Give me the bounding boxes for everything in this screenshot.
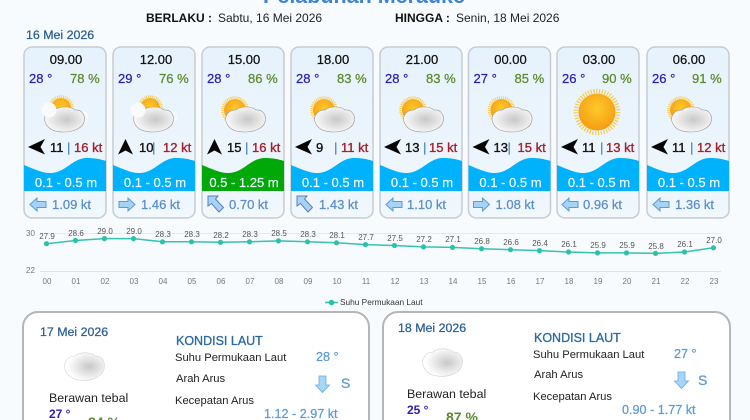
forecast card 21.00: 21.00 (406, 52, 438, 67)
line chart: sea surface temperature: 25.9 (619, 241, 635, 250)
icon: current arrow down (316, 376, 330, 392)
icon: current arrow down (674, 372, 688, 388)
line chart: sea surface temperature: 28.2 (213, 231, 229, 240)
forecast card 21.00: 0.1 - 0.5 m (391, 175, 453, 190)
icon: thick cloud (423, 349, 463, 376)
forecast card 03.00: | (600, 140, 603, 155)
forecast card 18.00: 18.00 (317, 52, 349, 67)
icon: current arrow (119, 198, 135, 211)
forecast card 09.00: 09.00 (50, 52, 82, 67)
icon: sun behind cloud (42, 96, 88, 132)
line chart: sea surface temperature: 26.8 (474, 237, 490, 246)
forecast card 03.00 (557, 47, 639, 218)
line chart: sea surface temperature: 15 (478, 277, 487, 286)
forecast card 00.00: 85 % (514, 71, 545, 86)
icon: full sun (576, 91, 618, 133)
forecast card 21.00: 28 ° (385, 71, 408, 86)
line chart: sea surface temperature: 29.0 (97, 227, 113, 236)
forecast card 15.00: 15 (227, 140, 241, 155)
date heading: 17 Mei 2026 (40, 325, 108, 339)
line chart: sea surface temperature: 28.5 (271, 229, 287, 238)
forecast card 15.00: 15.00 (228, 52, 260, 67)
line chart: sea surface temperature: 16 (507, 277, 516, 286)
panel: 18 Mei 2026: Arah Arus (534, 369, 584, 381)
line chart: sea surface temperature: 22 (681, 277, 690, 286)
forecast card 12.00: 0.1 - 0.5 m (124, 175, 186, 190)
forecast card 18.00: 11 kt (341, 140, 369, 155)
chart legend: Suhu Permukaan Laut (340, 297, 423, 307)
forecast card 21.00: 13 (405, 140, 419, 155)
validity header: BERLAKU : (146, 11, 212, 25)
line chart: sea surface temperature: 28.6 (68, 229, 84, 238)
forecast card 00.00: 27 ° (474, 71, 497, 86)
line chart: sea surface temperature: 09 (304, 277, 313, 286)
line chart: sea surface temperature: 27.0 (706, 236, 722, 245)
panel: 17 Mei 2026: Berawan tebal (49, 391, 128, 405)
line chart: sea surface temperature: 25.9 (590, 241, 606, 250)
line chart: sea surface temperature: 27.2 (416, 235, 432, 244)
icon: wind direction (651, 139, 668, 154)
line chart: sea surface temperature: 28.3 (155, 230, 171, 239)
icon: current arrow (474, 198, 490, 211)
date heading: 18 Mei 2026 (398, 321, 466, 335)
panel: 18 Mei 2026: 0.90 - 1.77 kt (622, 403, 696, 417)
wave height (647, 158, 729, 191)
forecast card 09.00: 28 ° (29, 71, 52, 86)
line chart: sea surface temperature: 05 (188, 277, 197, 286)
forecast card 03.00: 13 kt (606, 140, 635, 155)
forecast card 12.00: 29 ° (118, 71, 141, 86)
panel: 18 Mei 2026: Kecepatan Arus (533, 391, 612, 403)
line chart: sea surface temperature: 27.1 (445, 235, 461, 244)
line chart: sea surface temperature: 28.3 (300, 230, 316, 239)
icon: sun behind cloud (130, 96, 178, 132)
forecast card 15.00: 28 ° (207, 71, 230, 86)
forecast card 12.00: 10 (139, 140, 153, 155)
panel: 17 Mei 2026: Arah Arus (176, 373, 226, 385)
panel: 17 Mei 2026 (23, 312, 369, 420)
wave height (291, 158, 373, 191)
icon: sun and cloud (312, 98, 355, 132)
validity header: HINGGA : (395, 11, 450, 25)
forecast card 18.00: | (334, 140, 337, 155)
forecast card 06.00 (647, 47, 729, 218)
forecast card 15.00: 0.5 - 1.25 m (209, 175, 279, 190)
forecast card 06.00: 0.1 - 0.5 m (658, 175, 720, 190)
wave height (202, 158, 284, 191)
panel: 17 Mei 2026: Suhu Permukaan Laut (175, 352, 287, 364)
panel: 18 Mei 2026 (383, 312, 730, 420)
forecast card 18.00 (291, 47, 373, 218)
icon: wind direction (561, 139, 578, 154)
forecast card 12.00: 1.46 kt (141, 197, 180, 212)
panel: 18 Mei 2026: Berawan tebal (407, 387, 486, 401)
forecast card 09.00: 1.09 kt (52, 197, 91, 212)
forecast card 03.00: 26 ° (562, 71, 585, 86)
wave height (24, 158, 106, 191)
forecast card 09.00: | (67, 140, 70, 155)
forecast card 15.00 (202, 47, 284, 218)
icon: sun and cloud (489, 98, 532, 132)
line chart: sea surface temperature: 22 (26, 266, 35, 275)
wave height (380, 158, 462, 191)
line chart: sea surface temperature: 25.8 (648, 242, 664, 251)
line chart: sea surface temperature: 12 (391, 277, 400, 286)
forecast card 09.00: 0.1 - 0.5 m (35, 175, 97, 190)
line chart: sea surface temperature: 13 (420, 277, 429, 286)
line chart: sea surface temperature: 28.3 (184, 230, 200, 239)
icon: current arrow (30, 198, 46, 211)
line chart: sea surface temperature: 03 (130, 277, 139, 286)
line chart: sea surface temperature: 11 (362, 277, 371, 286)
forecast card 12.00 (113, 47, 195, 218)
forecast card 03.00: 0.1 - 0.5 m (568, 175, 630, 190)
icon: thick cloud (65, 353, 105, 380)
forecast card 18.00: 0.1 - 0.5 m (302, 175, 364, 190)
line chart: sea surface temperature: 08 (275, 277, 284, 286)
forecast card 12.00: | (152, 140, 155, 155)
line chart: sea surface temperature: 21 (652, 277, 661, 286)
line chart: sea surface temperature: 06 (217, 277, 226, 286)
line chart: sea surface temperature: 26.1 (677, 240, 693, 249)
forecast card 06.00: 26 ° (652, 71, 675, 86)
icon: wind direction (472, 139, 490, 154)
icon: current arrow (653, 198, 669, 211)
forecast card 03.00: 90 % (602, 71, 632, 86)
panel: 18 Mei 2026: Suhu Permukaan Laut (533, 349, 645, 361)
forecast card 00.00: 15 kt (518, 140, 546, 155)
forecast card 00.00: | (508, 140, 511, 155)
forecast card 18.00: 9 (316, 140, 323, 155)
forecast card 03.00: 11 (582, 140, 596, 155)
validity header: Senin, 18 Mei 2026 (456, 11, 560, 25)
forecast card 06.00: 11 (672, 140, 686, 155)
forecast card 21.00 (380, 47, 462, 218)
forecast card 06.00: 12 kt (697, 140, 726, 155)
icon: current arrow (297, 196, 312, 212)
line chart: sea surface temperature: 26.4 (532, 239, 548, 248)
line chart: sea surface temperature (26, 227, 722, 286)
forecast card 12.00: 12 kt (163, 140, 192, 155)
forecast card 21.00: | (423, 140, 426, 155)
forecast card 06.00: 91 % (692, 71, 722, 86)
validity header (146, 11, 560, 25)
line chart: sea surface temperature: 10 (333, 277, 342, 286)
forecast card 21.00: 83 % (426, 71, 456, 86)
forecast card 18.00: 28 ° (296, 71, 319, 86)
forecast card 00.00 (468, 47, 550, 218)
line chart: sea surface temperature: 04 (159, 277, 168, 286)
panel: 18 Mei 2026: 25 ° (407, 403, 429, 417)
forecast card 12.00: 12.00 (140, 52, 172, 67)
forecast card 12.00: 76 % (159, 71, 189, 86)
line chart: sea surface temperature: 20 (623, 277, 632, 286)
forecast card 06.00: | (690, 140, 693, 155)
line chart: sea surface temperature: 00 (43, 277, 52, 286)
forecast card 00.00: 13 (494, 140, 508, 155)
panel: 17 Mei 2026: Kecepatan Arus (175, 395, 254, 407)
forecast card 00.00: 00.00 (494, 52, 527, 67)
forecast card 09.00: 78 % (70, 71, 100, 86)
validity header: Sabtu, 16 Mei 2026 (218, 11, 322, 25)
icon: wind direction (384, 139, 401, 154)
forecast card 15.00: 0.70 kt (229, 197, 268, 212)
icon: sun and cloud (222, 98, 266, 132)
forecast card 15.00: | (245, 140, 248, 155)
forecast card 03.00: 03.00 (583, 52, 615, 67)
line chart: sea surface temperature: 27.9 (39, 232, 55, 241)
forecast card 00.00: 0.1 - 0.5 m (479, 175, 542, 190)
line chart: sea surface temperature: 27.7 (358, 233, 374, 242)
icon: current arrow (208, 196, 224, 212)
forecast card 09.00: 11 (50, 140, 64, 155)
forecast card 09.00: 16 kt (74, 140, 103, 155)
line chart: sea surface temperature: 14 (449, 277, 458, 286)
wave height (557, 158, 639, 191)
forecast card 15.00: 16 kt (252, 140, 281, 155)
icon: wind direction (295, 139, 312, 154)
icon: current arrow (562, 198, 578, 211)
icon: sun and cloud (400, 98, 444, 132)
icon: wind direction (28, 139, 45, 154)
forecast card 21.00: 15 kt (429, 140, 458, 155)
line chart: sea surface temperature: 29.0 (126, 227, 142, 236)
forecast card 18.00: 83 % (337, 71, 367, 86)
icon: wind direction (118, 139, 133, 154)
line chart: sea surface temperature: 07 (246, 277, 255, 286)
line chart: sea surface temperature: 26.6 (503, 238, 519, 247)
sea conditions: KONDISI LAUT (534, 331, 621, 345)
icon: current arrow (386, 198, 402, 211)
line chart: sea surface temperature: 17 (536, 277, 545, 286)
forecast card 09.00 (24, 47, 106, 218)
forecast card 21.00: 1.10 kt (407, 197, 446, 212)
line chart: sea surface temperature: 28.3 (242, 230, 258, 239)
line chart: sea surface temperature: 18 (565, 277, 574, 286)
line chart: sea surface temperature: 26.1 (561, 240, 577, 249)
panel: 17 Mei 2026: 28 ° (316, 350, 339, 364)
line chart: sea surface temperature: 19 (594, 277, 603, 286)
forecast card 00.00: 1.08 kt (496, 197, 535, 212)
panel: 18 Mei 2026: S (698, 372, 707, 388)
forecast card 06.00: 1.36 kt (675, 197, 714, 212)
panel: 18 Mei 2026: 27 ° (674, 347, 697, 361)
forecast card 15.00: 86 % (248, 71, 278, 86)
date heading: 16 Mei 2026 (26, 28, 94, 42)
icon: wind direction (207, 139, 222, 154)
sea conditions: KONDISI LAUT (176, 334, 263, 348)
wave height (113, 158, 195, 191)
forecast card 18.00: 1.43 kt (319, 197, 358, 212)
line chart: sea surface temperature: 30 (26, 229, 35, 238)
line chart: sea surface temperature: 28.1 (329, 231, 345, 240)
panel: 17 Mei 2026: S (341, 375, 350, 391)
line chart: sea surface temperature: 23 (710, 277, 719, 286)
line chart: sea surface temperature: 02 (101, 277, 110, 286)
line chart: sea surface temperature: 01 (72, 277, 81, 286)
icon: sun and cloud (668, 98, 712, 132)
forecast card 03.00: 0.96 kt (583, 197, 622, 212)
forecast card 06.00: 06.00 (673, 52, 705, 67)
wave height (468, 158, 550, 191)
line chart: sea surface temperature: 27.5 (387, 234, 403, 243)
